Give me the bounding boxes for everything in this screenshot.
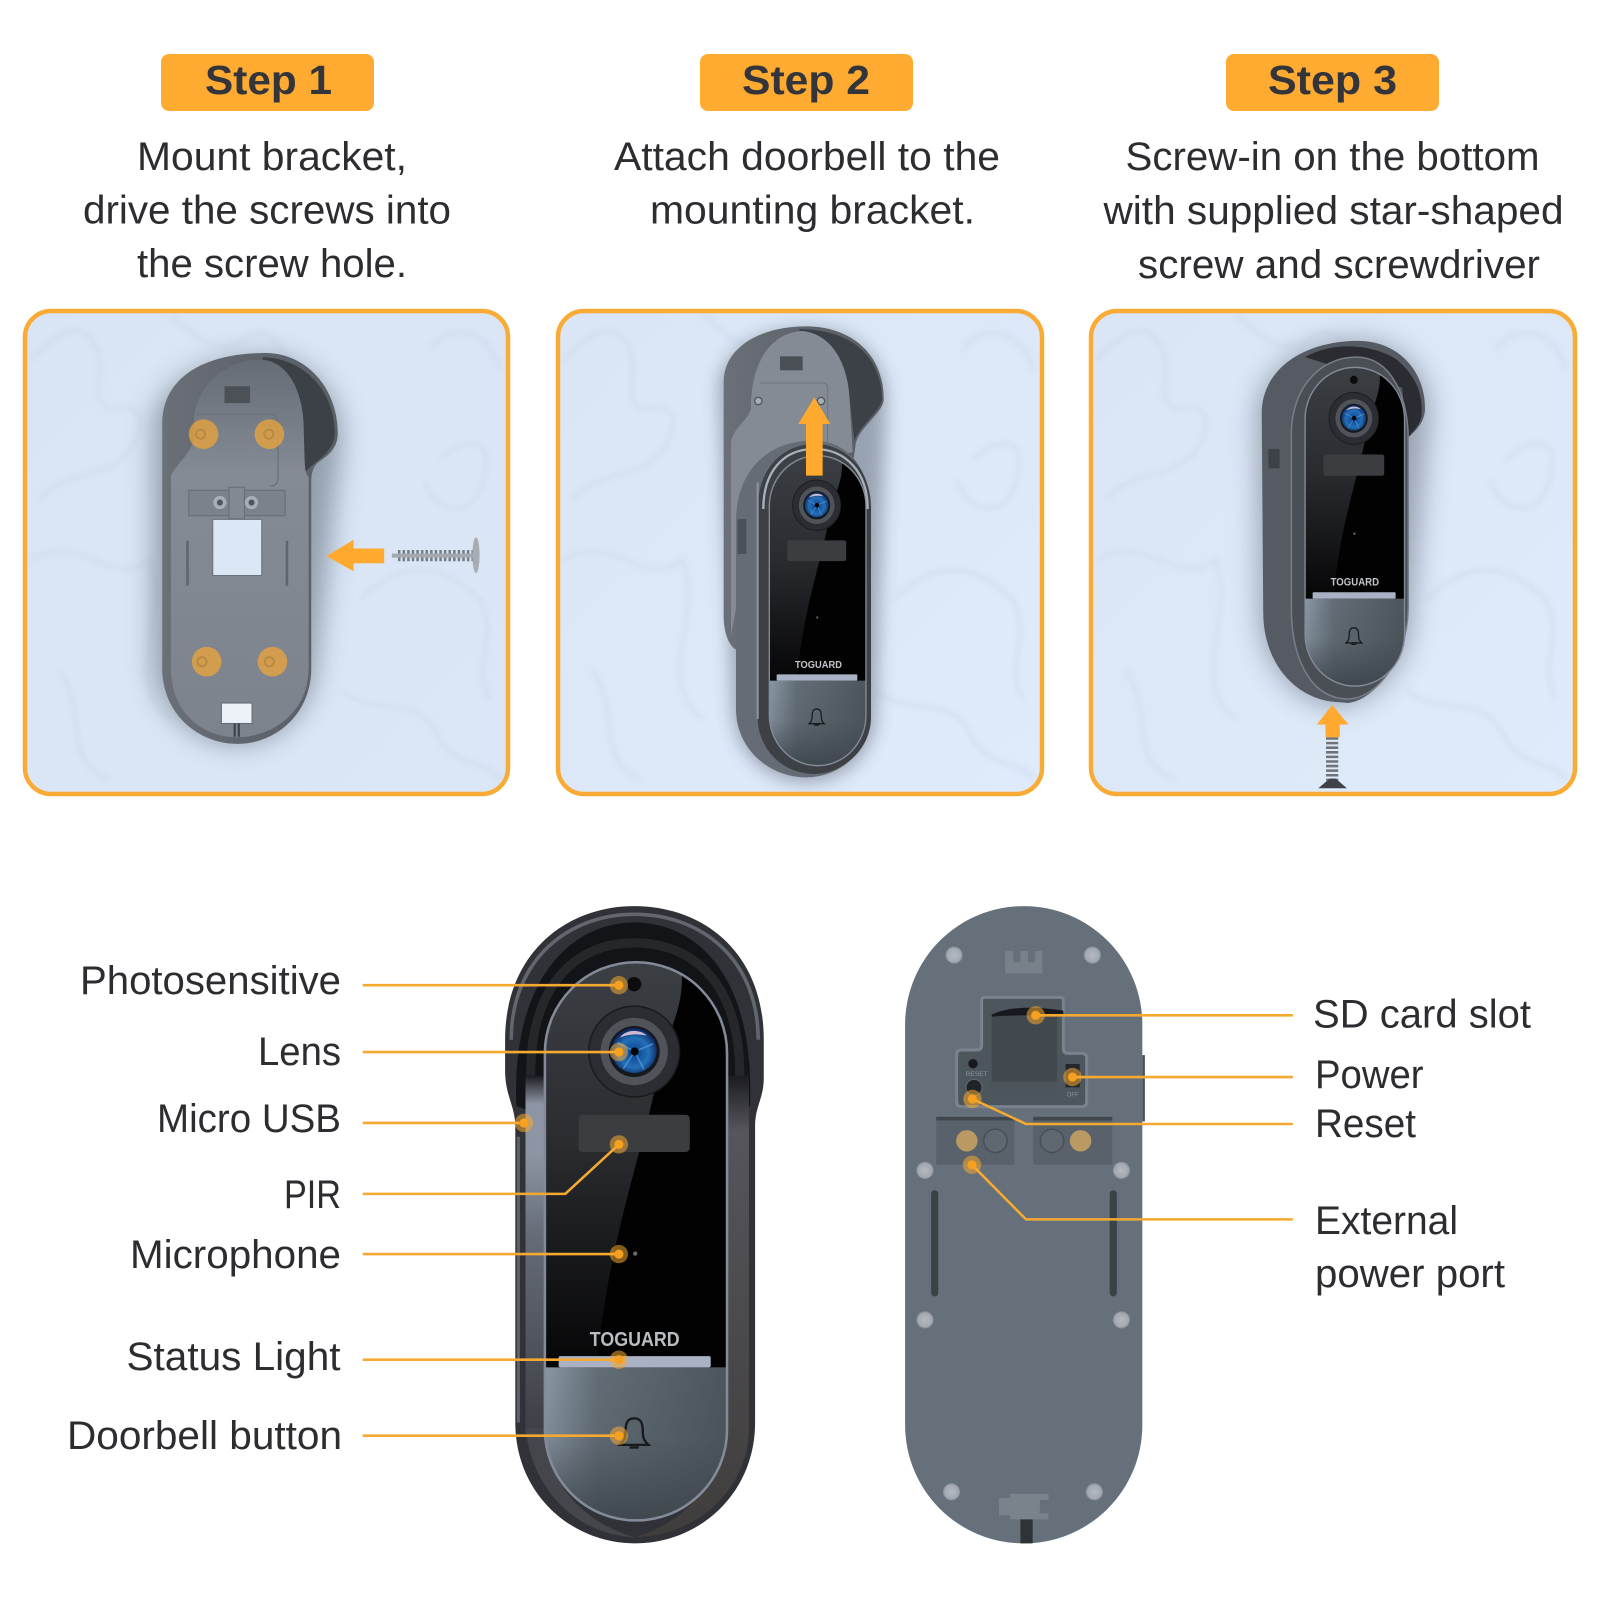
screw holes bbox=[916, 946, 1130, 1501]
callout: doorbell button: Doorbell button bbox=[67, 1414, 342, 1458]
callout: sd card slot bbox=[1027, 992, 1531, 1036]
arrow: up bbox=[1317, 705, 1348, 737]
callout: status light bbox=[126, 1335, 628, 1379]
step 2 instructions bbox=[614, 135, 1000, 232]
callout: photosensitive: Photosensitive bbox=[80, 959, 341, 1003]
step 2 instructions: Attach doorbell to the bbox=[614, 135, 1000, 179]
step 3 badge bbox=[1226, 54, 1439, 111]
screw point markers bbox=[189, 419, 287, 677]
brand mark: TOGUARD bbox=[795, 660, 842, 671]
bracket with screw points bbox=[153, 353, 342, 745]
top clip bbox=[1005, 951, 1042, 973]
step 3 column bbox=[1102, 54, 1564, 287]
step 2 instructions: mounting bracket. bbox=[650, 188, 975, 232]
step 3 instructions bbox=[1102, 135, 1564, 287]
step 1 instructions bbox=[83, 135, 451, 286]
shell and hood bbox=[505, 906, 764, 1543]
step 3 instructions: screw and screwdriver bbox=[1138, 243, 1540, 287]
compartment bbox=[957, 997, 1087, 1107]
callout: microphone bbox=[130, 1233, 628, 1277]
brand mark: TOGUARD bbox=[590, 1329, 680, 1351]
brand mark: TOGUARD bbox=[1331, 577, 1379, 589]
display face bbox=[541, 958, 730, 1526]
step 1 badge bbox=[161, 54, 374, 111]
step 1 badge: Step 1 bbox=[205, 57, 332, 103]
callout: external power port: power port bbox=[1315, 1252, 1505, 1296]
icon: screw bbox=[392, 537, 480, 573]
step 1 instructions: drive the screws into bbox=[83, 188, 451, 232]
step 3 instructions: Screw-in on the bottom bbox=[1126, 135, 1540, 179]
callout: external power port bbox=[963, 1156, 1505, 1296]
callout: power: Power bbox=[1315, 1053, 1424, 1097]
back plate bbox=[905, 906, 1142, 1543]
callout: microphone: Microphone bbox=[130, 1233, 341, 1277]
callout: pir bbox=[284, 1135, 628, 1217]
callout: lens: Lens bbox=[258, 1030, 341, 1074]
callout: reset bbox=[963, 1090, 1416, 1146]
panel: step 3 secure with screw bbox=[1091, 311, 1575, 794]
step 1 column bbox=[83, 54, 451, 286]
callout: reset: Reset bbox=[1315, 1102, 1416, 1146]
bottom clip and wire bbox=[999, 1494, 1048, 1543]
callout: pir: PIR bbox=[284, 1173, 341, 1217]
icon: screw bbox=[1318, 737, 1347, 788]
callout: status light: Status Light bbox=[126, 1335, 340, 1379]
assembled doorbell bbox=[1257, 341, 1430, 707]
compartment: RESET bbox=[966, 1071, 988, 1078]
callout: micro usb bbox=[157, 1097, 533, 1141]
step 2 badge bbox=[700, 54, 913, 111]
slots bbox=[931, 1190, 1117, 1296]
callout: doorbell button bbox=[67, 1414, 628, 1458]
panel: back of doorbell bbox=[905, 906, 1145, 1543]
panel: step 2 attach doorbell bbox=[558, 311, 1042, 794]
panel: front of doorbell bbox=[505, 906, 764, 1543]
external power wells bbox=[936, 1117, 1112, 1165]
step 2 column bbox=[614, 54, 1000, 232]
callout: external power port: External bbox=[1315, 1199, 1458, 1243]
step 1 instructions: the screw hole. bbox=[137, 242, 407, 286]
doorbell sliding onto bracket bbox=[719, 326, 886, 782]
callout: lens bbox=[258, 1030, 628, 1074]
step 3 instructions: with supplied star-shaped bbox=[1102, 189, 1564, 233]
callout: power bbox=[1063, 1053, 1424, 1097]
arrow: left bbox=[327, 540, 384, 571]
step 2 badge: Step 2 bbox=[742, 57, 870, 103]
arrow: up bbox=[798, 397, 830, 476]
panel: step 1 bracket bbox=[25, 311, 508, 794]
callout: micro usb: Micro USB bbox=[157, 1097, 341, 1141]
compartment: OFF bbox=[1067, 1092, 1079, 1099]
callouts: back features bbox=[963, 992, 1531, 1296]
callout: sd card slot: SD card slot bbox=[1313, 992, 1531, 1036]
callout: photosensitive bbox=[80, 959, 628, 1003]
step 3 badge: Step 3 bbox=[1268, 57, 1397, 103]
step 1 instructions: Mount bracket, bbox=[137, 135, 407, 179]
callouts: front features bbox=[67, 959, 628, 1458]
